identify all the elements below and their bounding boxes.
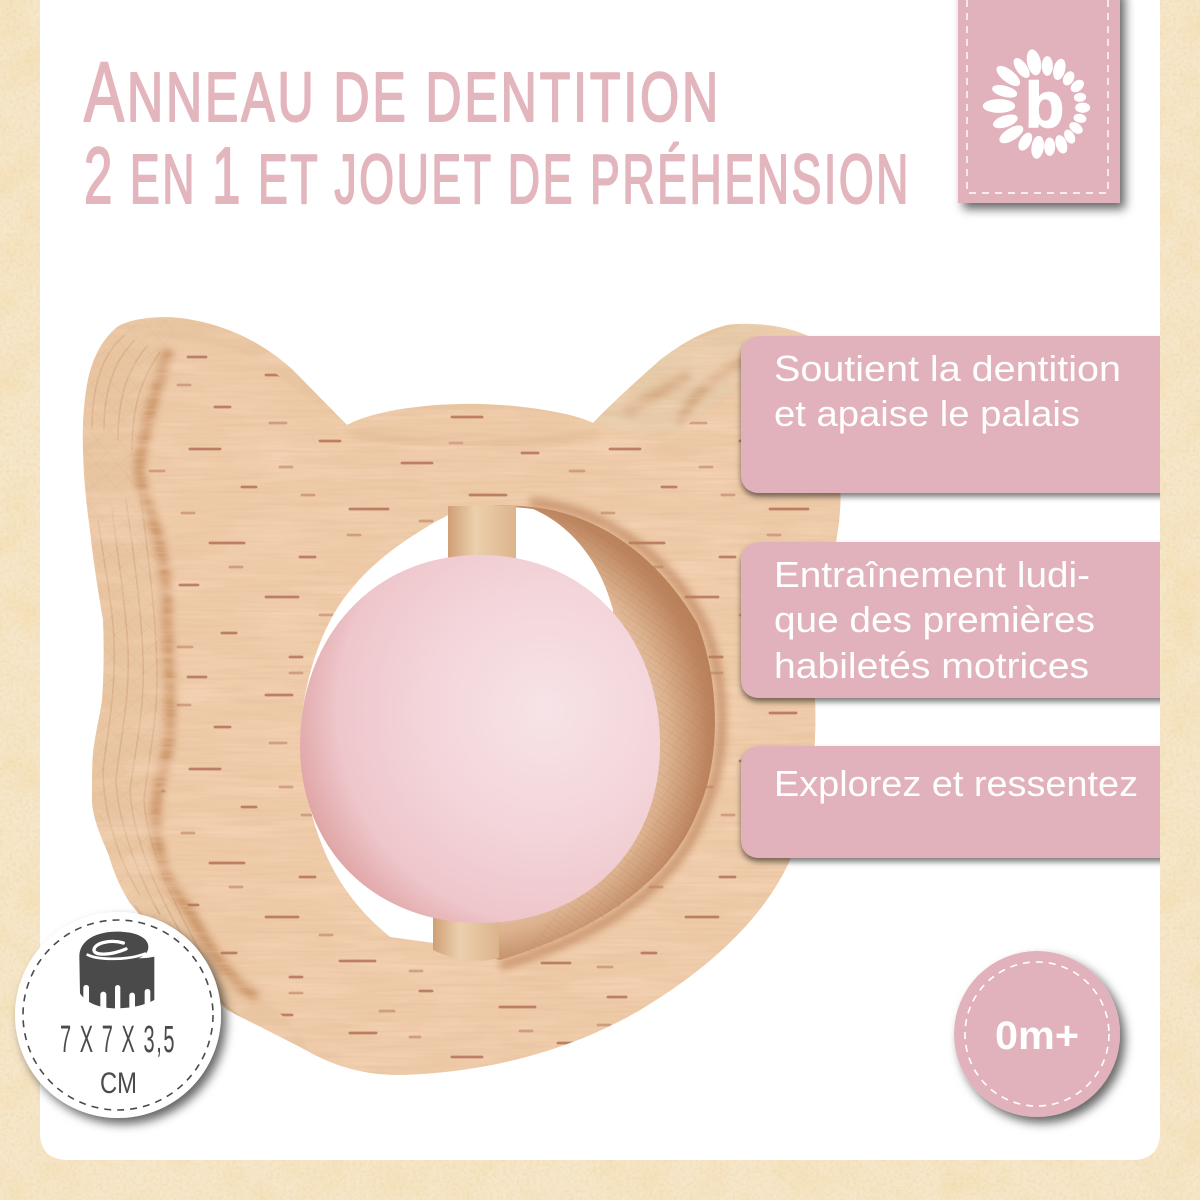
panel: entraînement ludique [741, 542, 1170, 698]
ring top crease [350, 432, 600, 442]
title line 1: ANNEAU DE DENTITION [84, 45, 721, 139]
age badge [954, 951, 1120, 1117]
end grain rings [92, 335, 250, 1025]
wood pores [148, 356, 840, 1058]
panel: soutient la dentition [741, 336, 1170, 493]
text line 1: Entraînement ludi- [774, 554, 1090, 595]
top dowel [448, 506, 516, 566]
text line 2: et apaise le palais [774, 393, 1080, 434]
hole rim shadow [500, 502, 722, 966]
badge disc [15, 912, 221, 1118]
tag background [958, 0, 1120, 203]
stitching [967, 0, 1108, 193]
end grain hatching [83, 320, 175, 927]
wooden cat teether [82, 317, 840, 1075]
badge disc [954, 951, 1120, 1117]
panel: explorez et ressentez [741, 746, 1170, 858]
wood fine grain [84, 317, 783, 1068]
wood body [82, 317, 840, 1075]
bottom dowel [433, 915, 499, 961]
wood mottling [83, 330, 799, 1064]
dimensions: 7 X 7 X 3,5 [60, 1019, 176, 1061]
logo letter: b [1025, 69, 1064, 141]
right ear shading [625, 360, 745, 425]
unit: CM [100, 1067, 137, 1100]
badge stitching [23, 920, 213, 1110]
hole inner wall [300, 506, 715, 960]
front face [142, 340, 860, 1100]
age text: 0m+ [995, 1014, 1079, 1058]
hole opening [300, 507, 613, 943]
title [84, 45, 911, 220]
brand tag [958, 0, 1120, 203]
text line 2: que des premières [774, 599, 1095, 640]
logo petals [984, 49, 1089, 159]
icon: measuring tape [79, 932, 154, 1016]
text line: Explorez et ressentez [774, 763, 1138, 804]
text line 1: Soutient la dentition [774, 348, 1121, 389]
size badge [15, 912, 221, 1118]
benefit panels [741, 336, 1170, 858]
text line 3: habiletés motrices [774, 645, 1089, 686]
right ear end grain [606, 324, 808, 410]
pink silicone ball [300, 555, 660, 923]
seam shadow [139, 350, 257, 997]
badge stitching [965, 962, 1109, 1106]
